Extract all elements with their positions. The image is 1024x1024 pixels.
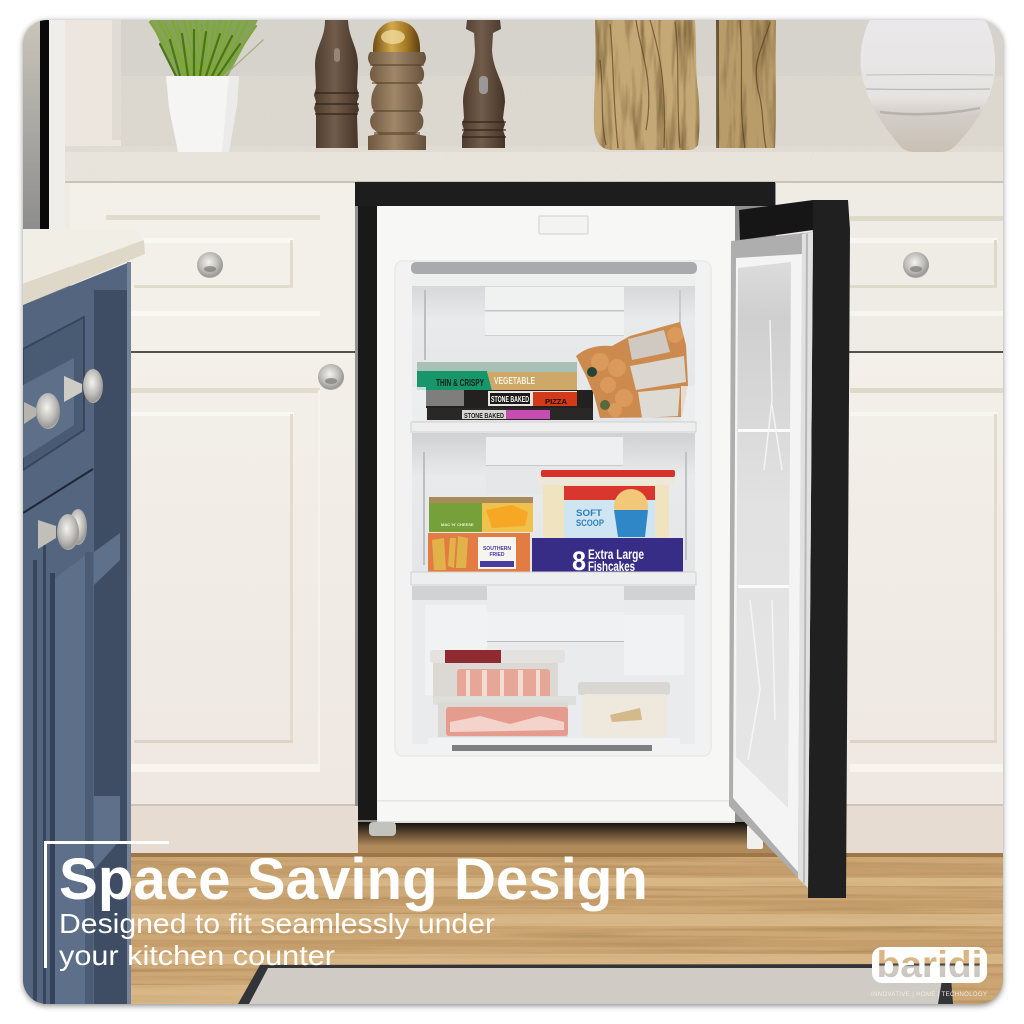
wooden log large [594,20,700,150]
food: green box: THIN & CRISPY [436,377,484,389]
white body [377,206,735,823]
logo [871,944,987,998]
food: vegetable box: VEGETABLE [494,375,535,387]
food: fishcakes box: Extra Large [588,547,644,562]
worktop [65,146,1003,183]
foot right [747,825,763,849]
food: second pizza box [427,408,593,420]
open door [729,200,850,898]
subtitle: Designed to fit seamlessly under [59,908,495,939]
island worktop [23,229,145,305]
food: fishcakes box [532,538,683,572]
food: fishcakes box: 8 [572,546,586,576]
door top vent [739,200,813,240]
logo: baridi [876,944,982,985]
black top and side [355,182,775,820]
pepper mill left [314,20,359,148]
food: ice cream tub: SCOOP [576,518,605,529]
food: green box [417,362,577,390]
food: ice cream tub [537,470,675,538]
knob: right drawer [903,252,929,278]
door black edge [808,200,850,898]
food: southern fried box [428,533,530,572]
food: vegetable box [487,372,577,390]
lower door panels [33,545,93,1004]
knob: island upper pair [24,369,103,429]
blue island unit [23,262,131,1004]
food: stone baked pizza box [426,390,593,408]
freezer cabinet [355,182,775,849]
clear drawer front [412,387,426,421]
bracket around caption [44,841,169,968]
food: chicken tray [578,682,670,738]
subtitle [59,908,495,971]
thermostat [539,216,588,234]
food: stone baked pizza box: STONE BAKED [491,394,529,404]
pepper mill with gold top [368,21,426,150]
food: fishcakes box: Fishcakes [588,559,635,574]
ceramic vase [861,20,995,152]
food: southern fried box: SOUTHERN [483,546,511,552]
knob: door [318,364,344,390]
door inner pane with reflections [736,262,791,808]
food: ice cream tub: SOFT [576,508,602,519]
food: second pizza box: STONE BAKED [464,411,504,420]
adjustable foot left [369,822,396,836]
door inner liner [733,254,802,872]
top drawer [412,274,695,424]
right top drawer [776,183,1003,353]
food: meat tray bottom [433,696,576,737]
recess column [94,262,131,1004]
wall and backsplash [23,20,1003,230]
logo: INNOVATIVE | HOME | TECHNOLOGY [871,992,987,998]
plant in white pot [150,20,263,152]
knob: drawer [197,252,223,278]
subtitle: your kitchen counter [59,940,335,971]
door silver frame [729,232,813,888]
left top drawer [65,183,355,353]
wooden floor [23,822,1003,1004]
inner cavity [395,261,711,756]
middle drawer [412,433,695,578]
drawer split [23,469,93,513]
knob: island lower pair [38,509,87,550]
food: southern fried box: FRIED [490,552,505,558]
title: Space Saving Design [59,847,648,912]
food: stone baked pizza box: PIZZA [545,397,568,406]
food: mac and cheese box: MAC 'N' CHEESE [441,522,474,527]
plinth [70,806,1003,853]
wooden log small [716,20,776,148]
food: meat tray top [430,650,565,698]
rug [238,964,953,1004]
food: potato bag [576,322,688,418]
food: mac and cheese box [429,497,533,532]
bottom drawer [412,586,695,751]
drawer panel [23,317,84,470]
left lower door [131,353,355,806]
pepper mill right [462,20,506,148]
right lower door [808,353,1003,806]
door gasket [798,232,813,888]
